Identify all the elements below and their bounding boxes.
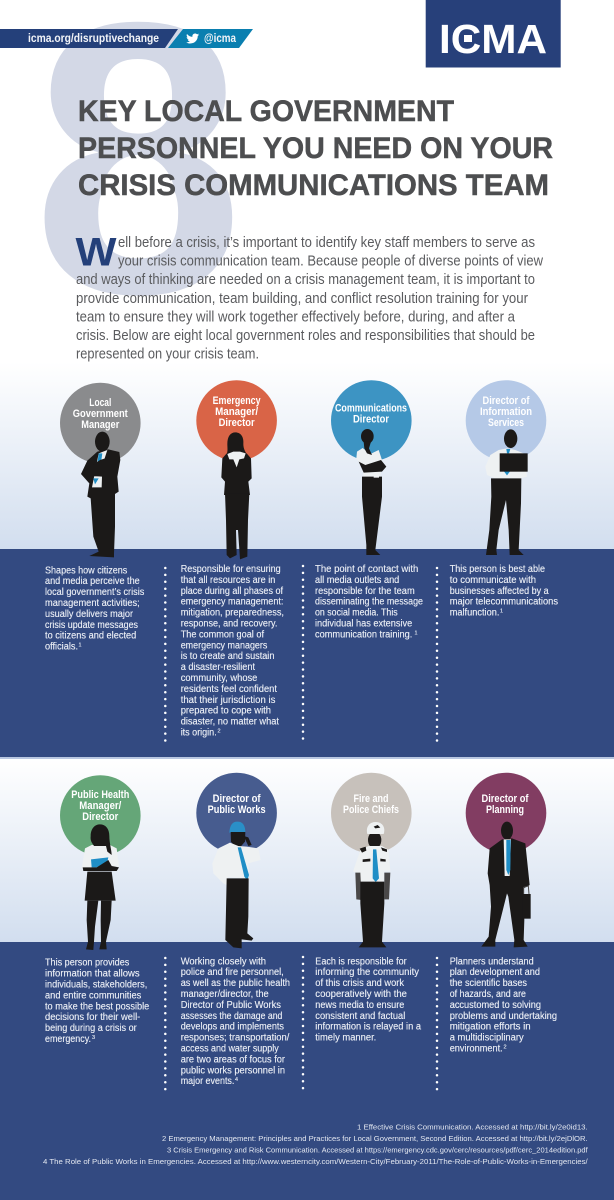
- footnotes: [43, 1122, 589, 1166]
- description: 4: [235, 1077, 238, 1083]
- role: Director of Planning: [450, 773, 557, 1054]
- description: to make the best possible: [45, 1001, 150, 1012]
- description: This person is best able: [450, 564, 546, 575]
- description: individual has extensive: [315, 618, 413, 630]
- intro paragraph: team to ensure they will work together effectively before, during, and after a: [76, 308, 516, 325]
- description: on social media. This: [315, 608, 398, 619]
- description: cooperatively with the: [315, 989, 408, 1000]
- figure: uniformed chief: [353, 822, 390, 947]
- intro paragraph: crisis. Below are eight local government roles and responsibilities that should be: [76, 327, 535, 344]
- footnotes: 3 Crisis Emergency and Risk Communication. Accessed at https://emergency.cdc.gov/cerc/resources/pdf/cerc_2014edition.pdf: [167, 1146, 589, 1154]
- description: The point of contact with: [315, 564, 418, 575]
- description: is to create and sustain: [181, 651, 274, 662]
- description: decisions for their well-: [45, 1012, 140, 1023]
- circle label: Planning: [486, 804, 524, 816]
- circle label: Director of: [482, 793, 529, 805]
- description: This person provides: [45, 958, 129, 969]
- circle label: Emergency: [213, 395, 261, 407]
- description: businesses affected by a: [450, 586, 549, 597]
- circle label: Government: [73, 408, 128, 420]
- description: access and water supply: [181, 1044, 279, 1054]
- description: prepared to cope with: [181, 706, 271, 717]
- description: 1: [500, 608, 503, 614]
- description: major events.: [181, 1076, 234, 1087]
- description: plan development and: [450, 967, 540, 978]
- circle label: Director: [353, 414, 389, 426]
- figure: woman in suit: [221, 432, 252, 559]
- description: Director of Public Works: [181, 1000, 281, 1011]
- description: Each is responsible for: [315, 956, 407, 967]
- role: Fire and Police Chiefs: [315, 773, 422, 1044]
- description: public works personnel in: [181, 1065, 285, 1076]
- description: that their jurisdiction is: [181, 695, 275, 706]
- circle label: Director: [219, 417, 255, 429]
- description: [181, 564, 284, 738]
- circle label: Communications: [335, 403, 407, 415]
- description: information is relayed in a: [315, 1022, 422, 1033]
- description: residents feel confident: [181, 684, 277, 695]
- figure: woman with folded arms: [356, 429, 386, 555]
- description: [315, 564, 423, 640]
- intro paragraph: your crisis communication team. Because people of diverse points of view: [118, 253, 543, 270]
- description: Working closely with: [181, 956, 266, 967]
- description: emergency management:: [181, 597, 283, 608]
- circle label: [196, 380, 277, 461]
- description: emergency.: [45, 1034, 91, 1045]
- description: usually delivers major: [45, 609, 134, 620]
- description: news media to ensure: [315, 1000, 405, 1011]
- circle label: Public Works: [208, 804, 266, 816]
- circle label: Public Health: [71, 789, 129, 801]
- description: that all resources are in: [181, 575, 275, 586]
- description: [181, 956, 290, 1087]
- description: environment.: [450, 1044, 503, 1054]
- circle label: Director of: [482, 395, 530, 407]
- intro paragraph: and ways of thinking are needed on a crisis management team, it is important to: [76, 271, 535, 288]
- description: malfunction.: [450, 608, 499, 619]
- role: Communications Director: [315, 380, 423, 640]
- figure: woman with tablet: [82, 824, 119, 950]
- circle label: Manager: [81, 419, 119, 431]
- footnotes: 1 Effective Crisis Communication. Accessed at http://bit.ly/2e0id13.: [357, 1122, 588, 1131]
- description: 2: [218, 728, 221, 734]
- description: accustomed to solving: [450, 1000, 541, 1011]
- description: responses; transportation/: [181, 1033, 290, 1044]
- description: the scientific bases: [450, 978, 527, 989]
- description: and entire communities: [45, 990, 141, 1001]
- description: mitigation, preparedness,: [181, 608, 284, 619]
- description: a disaster-resilient: [181, 662, 255, 673]
- description: officials.: [45, 642, 78, 653]
- description: consistent and factual: [315, 1011, 405, 1022]
- description: [45, 958, 150, 1045]
- description: responsible for the team: [315, 586, 415, 597]
- circle label: Information: [480, 406, 532, 418]
- intro paragraph: represented on your crisis team.: [76, 346, 259, 363]
- logo: ICMA: [426, 0, 561, 68]
- description: informing the community: [315, 967, 419, 978]
- band: first row descriptions: [0, 549, 614, 757]
- circle label: [196, 773, 277, 853]
- title: KEY LOCAL GOVERNMENT: [78, 95, 454, 128]
- twitter handle bar: [168, 29, 253, 48]
- icon: twitter bird: [186, 33, 199, 43]
- description: [450, 956, 557, 1054]
- circle label: [331, 773, 412, 853]
- circle label: [60, 383, 141, 463]
- logo: ICMA: ICMA: [439, 16, 547, 62]
- circle label: Fire and: [354, 793, 388, 805]
- description: its origin.: [181, 728, 217, 738]
- twitter handle bar: @icma: [204, 33, 237, 45]
- description: place during all phases of: [181, 586, 283, 597]
- circle label: Manager/: [79, 800, 121, 812]
- description: develops and implements: [181, 1022, 284, 1033]
- description: to citizens and elected: [45, 631, 136, 642]
- description: police and fire personnel,: [181, 967, 284, 978]
- description: disseminating the message: [315, 597, 423, 608]
- description: and media perceive the: [45, 576, 140, 587]
- description: Responsible for ensuring: [181, 564, 281, 575]
- role: Director of Information Services: [450, 380, 558, 619]
- intro paragraph: provide communication, team building, and conflict resolution training for your: [76, 290, 528, 307]
- title: PERSONNEL YOU NEED ON YOUR: [78, 132, 553, 165]
- description: as well as the public health: [181, 978, 290, 989]
- figure: man with crossed arms: [81, 432, 120, 557]
- title: [78, 95, 553, 202]
- drop cap W: W: [76, 230, 117, 274]
- description: management activities;: [45, 598, 140, 609]
- description: major telecommunications: [450, 597, 558, 608]
- description: emergency managers: [181, 640, 267, 651]
- description: [450, 564, 558, 619]
- description: The common goal of: [181, 629, 264, 640]
- header link bar: icma.org/disruptivechange: [28, 31, 159, 45]
- role: Director of Public Works: [181, 773, 290, 1087]
- column dividers row 2: [165, 957, 437, 1091]
- description: information that allows: [45, 969, 140, 980]
- description: response, and recovery.: [181, 618, 277, 630]
- circle label: Services: [488, 417, 524, 429]
- description: 2: [504, 1044, 507, 1050]
- figure: man with hard hat and phone: [212, 822, 261, 948]
- circle label: Director: [82, 811, 118, 823]
- circle label: [60, 775, 141, 856]
- description: disaster, no matter what: [181, 717, 279, 728]
- role: Public Health Manager/Director: [45, 775, 150, 1045]
- description: 1: [78, 642, 82, 648]
- circle label: Director of: [213, 793, 261, 805]
- circle label: Local: [89, 397, 111, 409]
- circle label: [466, 773, 546, 853]
- description: of hazards, and are: [450, 989, 526, 1000]
- description: of this crisis and work: [315, 978, 404, 989]
- description: problems and undertaking: [450, 1011, 557, 1022]
- description: 3: [92, 1035, 95, 1041]
- description: to communicate with: [450, 575, 536, 586]
- description: crisis update messages: [45, 620, 138, 631]
- description: Shapes how citizens: [45, 565, 127, 576]
- footnotes: 2 Emergency Management: Principles and Practices for Local Government, Second Edition. Accessed at http://bit.ly/2ejDlOR.: [162, 1134, 588, 1143]
- circle label: [331, 380, 412, 461]
- description: mitigation efforts in: [450, 1022, 531, 1033]
- circle label: Police Chiefs: [343, 804, 399, 816]
- footnotes: 4 The Role of Public Works in Emergencies. Accessed at http://www.westerncity.com/Western-City/February-2011/The-Role-of-Public-Works-in-Emergencies/: [43, 1157, 589, 1166]
- circle label: [466, 380, 546, 461]
- description: being during a crisis or: [45, 1023, 137, 1034]
- column dividers row 1: [165, 566, 437, 742]
- description: timely manner.: [315, 1033, 376, 1044]
- band: second row descriptions and footnotes: [0, 942, 614, 1200]
- description: [45, 565, 144, 653]
- description: individuals, stakeholders,: [45, 980, 147, 990]
- description: communication training.: [315, 629, 412, 640]
- description: assesses the damage and: [181, 1011, 282, 1022]
- description: local government’s crisis: [45, 587, 144, 598]
- circle label: Manager/: [215, 406, 258, 418]
- role: Emergency Manager/Director: [181, 380, 284, 738]
- title: CRISIS COMMUNICATIONS TEAM: [78, 169, 549, 202]
- figure: man in suit with briefcase: [481, 822, 531, 947]
- description: manager/director, the: [181, 989, 269, 1000]
- description: all media outlets and: [315, 575, 399, 586]
- description: Planners understand: [450, 956, 534, 967]
- description: 1: [414, 630, 418, 636]
- intro paragraph: ell before a crisis, it’s important to identify key staff members to serve as: [118, 234, 535, 251]
- header link bar: [0, 29, 178, 48]
- description: a multidisciplinary: [450, 1033, 524, 1044]
- description: are two areas of focus for: [181, 1054, 286, 1065]
- role: Local Government Manager: [45, 383, 144, 653]
- figure: man holding laptop: [485, 429, 528, 555]
- description: [315, 956, 422, 1044]
- description: community, whose: [181, 673, 258, 684]
- intro paragraph: [76, 230, 543, 363]
